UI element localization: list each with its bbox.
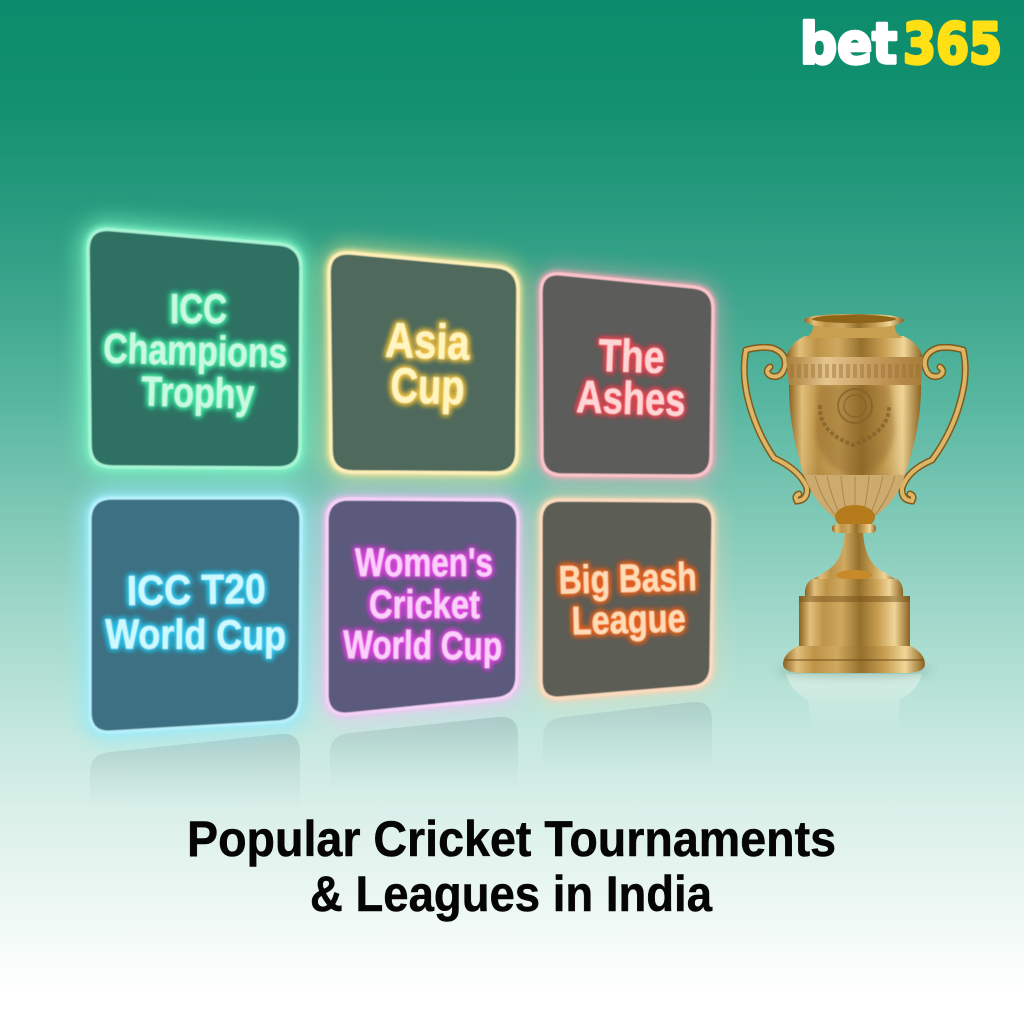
logo: bet365 — [800, 12, 1002, 77]
title — [187, 811, 836, 922]
panel 4 face — [90, 498, 301, 732]
trophy drum — [799, 596, 910, 648]
panel: The Ashes — [541, 274, 713, 476]
panel 6 label: Big Bash — [558, 555, 697, 603]
panel 5 label glow: Women's — [355, 541, 493, 585]
panel 1 label glow: Trophy — [141, 367, 256, 418]
trophy wreath emblem — [820, 389, 889, 445]
icon: golden trophy — [744, 314, 965, 730]
panel 6 label — [558, 555, 697, 643]
panel 2 face — [329, 253, 518, 473]
panel 6 label glow: League — [571, 597, 686, 643]
panel 1 face — [88, 229, 301, 468]
panel 3 label glow — [576, 329, 686, 426]
trophy stem — [812, 530, 897, 580]
panel 2 label glow: Cup — [390, 359, 465, 415]
trophy foot — [783, 646, 925, 673]
panel 4 label glow — [105, 565, 286, 659]
panel 6 face — [541, 500, 713, 698]
panel: Big Bash League — [541, 500, 713, 698]
panel 4 label: World Cup — [105, 610, 286, 659]
panel 4 label glow: ICC T20 — [126, 565, 266, 614]
trophy base step — [805, 579, 903, 596]
panel 2 label — [385, 314, 471, 415]
panel 1 tight glow — [88, 229, 301, 468]
panel 6 label glow: Big Bash — [558, 555, 697, 603]
panel 5 label glow — [343, 541, 502, 669]
left handle — [744, 347, 807, 501]
panel 5 label: Cricket — [369, 583, 480, 627]
panel 6 label glow — [558, 555, 697, 643]
trophy floor shadow — [776, 666, 932, 676]
right handle — [902, 347, 965, 501]
panel 5 label glow: World Cup — [343, 623, 502, 669]
panel 2 label: Asia — [385, 314, 471, 371]
panel: ICC Champions Trophy — [88, 229, 301, 468]
trophy dark reflection — [815, 384, 895, 476]
panel 4 tight glow — [90, 498, 301, 732]
logo number: 365: 365 — [903, 12, 1002, 77]
panel 6 wide glow — [541, 500, 713, 698]
trophy reflection — [786, 674, 922, 730]
trophy fluted base — [805, 475, 905, 524]
panel 5 wide glow — [327, 499, 518, 714]
trophy shoulder — [786, 336, 923, 357]
panel 3 label glow: The — [598, 329, 665, 383]
panel 4 label glow: World Cup — [105, 610, 286, 659]
panel: ICC T20 World Cup — [90, 498, 301, 732]
logo word: bet: bet — [800, 12, 897, 77]
panel 1 wide glow — [88, 229, 301, 468]
panel 1 label glow: ICC — [170, 285, 227, 332]
panel 4 wide glow — [90, 498, 301, 732]
panel 2 tight glow — [329, 253, 518, 473]
panel 5 label — [343, 541, 502, 669]
panel 1 label glow — [103, 285, 288, 418]
panel 2 label glow: Asia — [385, 314, 471, 371]
panel 3 label glow: Ashes — [576, 370, 686, 426]
panel 2 label: Cup — [390, 359, 465, 415]
panel 3 tight glow — [541, 274, 713, 476]
panel 6 label: League — [571, 597, 686, 643]
panel 5 label: World Cup — [343, 623, 502, 669]
trophy decorated band — [786, 357, 923, 385]
panel 5 face — [327, 499, 518, 714]
panel 2 label glow — [385, 314, 471, 415]
panel 1 label: Champions — [103, 324, 288, 377]
panel 2 wide glow — [329, 253, 518, 473]
panel 1 label — [103, 285, 288, 418]
panel 5 tight glow — [327, 499, 518, 714]
panel 4 label — [105, 565, 286, 659]
panel: Asia Cup — [329, 253, 518, 473]
panel 3 label: Ashes — [576, 370, 686, 426]
title line 1: Popular Cricket Tournaments — [187, 811, 836, 867]
panel 3 wide glow — [541, 274, 713, 476]
trophy collar — [832, 524, 876, 533]
panel 3 label: The — [598, 329, 665, 383]
trophy neck — [805, 322, 903, 338]
panel 4 label: ICC T20 — [126, 565, 266, 614]
panel 6 tight glow — [541, 500, 713, 698]
panel 1 label glow: Champions — [103, 324, 288, 377]
panel 5 label glow: Cricket — [369, 583, 480, 627]
panel 5 label: Women's — [355, 541, 493, 585]
panel reflections on the floor — [90, 702, 712, 810]
panel 1 label: ICC — [170, 285, 227, 332]
trophy cup body — [789, 380, 921, 524]
title line 2: & Leagues in India — [310, 866, 713, 922]
panel: Women's Cricket World Cup — [327, 499, 518, 714]
panel 3 face — [541, 274, 713, 476]
panel 1 label: Trophy — [141, 367, 256, 418]
panel 3 label — [576, 329, 686, 426]
trophy rim — [804, 314, 904, 328]
